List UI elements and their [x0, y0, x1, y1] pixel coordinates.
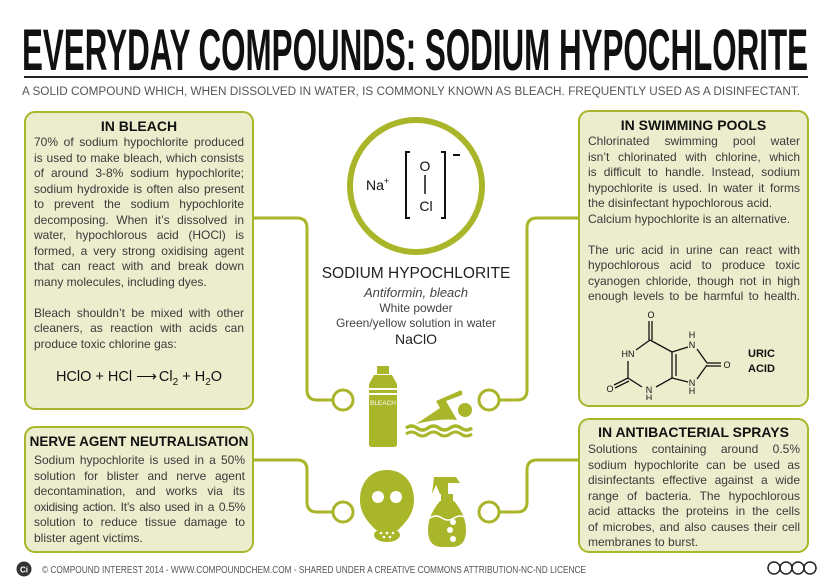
text: swimming pools: enough levels to be harmful to health.: [588, 289, 800, 303]
compound info: [322, 265, 510, 347]
structure circle: O: [420, 158, 431, 174]
structure circle: +: [384, 176, 389, 186]
uric acid structure: H: [689, 386, 695, 396]
text: antibacterial sprays: disinfectants effective against a wide: [588, 473, 800, 487]
text: nerve agent: oxidising action. It’s also used in a 0.5%: [34, 500, 245, 514]
title and subtitle: [22, 18, 808, 98]
text: bleach: to prevent the sodium hypochlorite: [34, 197, 244, 211]
text: antibacterial sprays: [588, 442, 800, 549]
compound info: Antiformin, bleach: [363, 285, 468, 300]
compound info: NaClO: [395, 331, 437, 347]
structure circle: Na: [366, 177, 384, 193]
text: antibacterial sprays: sodium hypochlorite can be used as: [588, 458, 800, 472]
subtitle: A SOLID COMPOUND WHICH, WHEN DISSOLVED IN WATER, IS COMMONLY KNOWN AS BLEACH. FREQUENTLY USED AS A DISINFECTANT.: [22, 86, 800, 98]
text: bleach: water, hypochlorous acid (HOCl) is: [34, 228, 244, 242]
compound info: Green/yellow solution in water: [336, 316, 496, 330]
footer text: © COMPOUND INTEREST 2014 - WWW.COMPOUNDCHEM.COM - SHARED UNDER A CREATIVE COMMONS ATTRIBUTION-NC-ND LICENCE: [42, 564, 586, 576]
text: swimming pools: cyanogen chloride, though not in high: [588, 274, 800, 288]
label: uric acid: [748, 348, 775, 375]
text: swimming pools: Chlorinated swimming pool water: [588, 134, 800, 148]
icon: swimmer: [406, 390, 472, 436]
text: antibacterial sprays: acid attacks the proteins in the cells: [588, 504, 800, 518]
uric acid structure: HN: [622, 349, 634, 359]
text: swimming pools: The uric acid in urine can react with: [588, 242, 800, 256]
compound info: SODIUM HYPOCHLORITE: [322, 265, 510, 282]
uric acid structure: O: [606, 384, 614, 394]
text: nerve agent: [34, 453, 245, 544]
text: bleach: that can react with and break down: [34, 259, 244, 273]
label: uric acid: URIC: [748, 348, 775, 360]
uric acid structure: O: [647, 310, 655, 320]
text: swimming pools: hypochlorite is used. In water it forms: [588, 180, 800, 194]
text: bleach: decomposing. When it’s dissolved in: [34, 212, 244, 226]
heading: nerve agent: NERVE AGENT NEUTRALISATION: [30, 434, 248, 449]
text: bleach: sodium hydroxide is often also present: [34, 182, 244, 196]
text: swimming pools: the disinfectant hypochlorous acid.: [588, 196, 772, 210]
text: bleach: [34, 135, 244, 350]
text: swimming pools: isn’t chlorinated with chlorine, which: [588, 150, 800, 164]
heading: antibacterial sprays: IN ANTIBACTERIAL SPRAYS: [598, 424, 789, 440]
compound info: White powder: [379, 301, 453, 315]
icon: spray bottle: [428, 477, 466, 547]
text: bleach: Bleach shouldn’t be mixed with other: [34, 306, 244, 320]
uric acid structure: N: [689, 340, 695, 350]
icon: bleach bottle: [369, 366, 397, 447]
text: nerve agent: Sodium hypochlorite is used in a 50%: [34, 453, 245, 467]
text: antibacterial sprays: of microbes, and also causes their cell: [588, 520, 800, 534]
equation: HClO + HCl ⟶ Cl2 + H2O: [56, 369, 222, 388]
icon: gas mask: [360, 470, 414, 542]
text: antibacterial sprays: membranes to burst.: [588, 535, 698, 549]
text: nerve agent: solution for blister and nerve agent: [34, 468, 245, 482]
text: nerve agent: blister agent victims.: [34, 530, 143, 544]
icon: cc licence: [768, 562, 816, 574]
text: bleach: of around 3-8% sodium hypochlorite;: [34, 166, 244, 180]
text: swimming pools: hypochlorous acid to produce toxic: [588, 258, 800, 272]
panel: nerve agent neutralisation: [24, 426, 254, 553]
text: antibacterial sprays: range of bacteria. The hypochlorous: [588, 488, 800, 502]
panel: in bleach: [24, 111, 254, 410]
text: nerve agent: decontamination, and works via its: [34, 484, 245, 498]
text: antibacterial sprays: Solutions containing around 0.5%: [588, 442, 800, 456]
text: swimming pools: is difficult to handle. Instead, sodium: [588, 165, 800, 179]
icon: ci logo: Ci: [20, 566, 28, 574]
text: bleach: produce toxic chlorine gas:: [34, 336, 177, 350]
text: bleach: is used to make bleach, which consists: [34, 150, 244, 164]
icon: ci logo: [16, 562, 32, 576]
structure circle: [350, 120, 482, 252]
text: bleach: formed, a very strong oxidising agent: [34, 244, 244, 258]
uric acid structure: N: [689, 378, 695, 388]
uric acid structure: O: [723, 360, 731, 370]
text: bleach: cleaners, as reaction with acids can: [34, 321, 244, 335]
text: bleach: 70% of sodium hypochlorite produced: [34, 135, 244, 149]
panel: in swimming pools: [578, 110, 809, 407]
text: swimming pools: Calcium hypochlorite is an alternative.: [588, 212, 790, 226]
footer: [16, 561, 817, 576]
text: swimming pools: [588, 134, 800, 303]
structure circle: Cl: [419, 198, 433, 214]
text: nerve agent: solution to reduce tissue damage to: [34, 515, 245, 529]
text: bleach: many molecules, including dyes.: [34, 274, 207, 288]
label: uric acid: ACID: [748, 363, 775, 375]
heading: in bleach: IN BLEACH: [101, 118, 177, 134]
uric acid structure: N: [646, 385, 652, 395]
heading: swimming pools: IN SWIMMING POOLS: [621, 117, 766, 133]
uric acid structure: H: [689, 330, 695, 340]
icon: bleach bottle: BLEACH: [370, 400, 396, 407]
uric acid structure: [606, 310, 775, 400]
panel: antibacterial sprays: [578, 418, 809, 553]
